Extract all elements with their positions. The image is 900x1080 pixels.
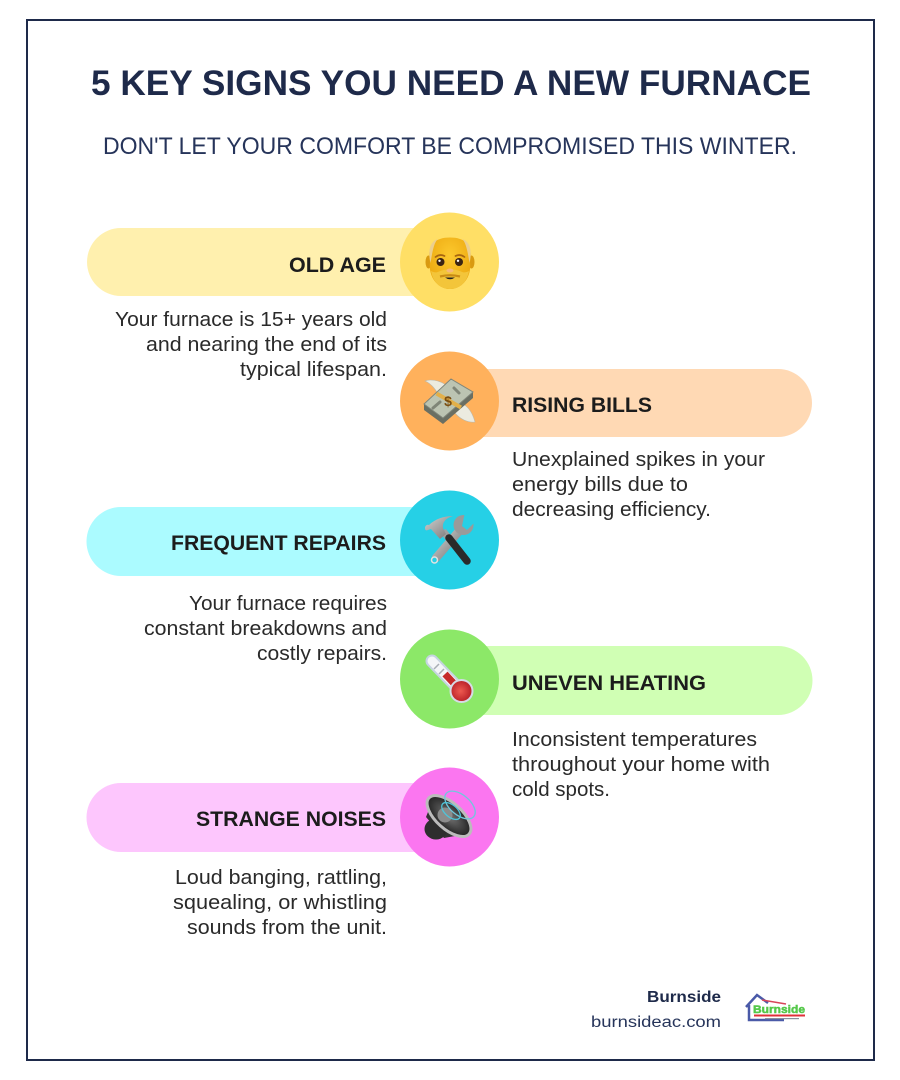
rising bills heading: RISING BILLS	[512, 393, 652, 417]
title: 5 KEY SIGNS YOU NEED A NEW FURNACE	[91, 64, 811, 103]
panel: uneven heating	[400, 630, 813, 801]
brand name: Burnside	[647, 989, 721, 1006]
old age description: typical lifespan.	[240, 358, 387, 381]
old age heading: OLD AGE	[289, 253, 386, 277]
panel: rising bills	[400, 352, 812, 521]
icon: older man face	[426, 238, 474, 289]
panel: frequent repairs	[87, 490, 499, 665]
strange noises description: squealing, or whistling	[173, 891, 387, 914]
frequent repairs banner	[87, 507, 430, 576]
icon: hammer and wrench	[425, 512, 478, 563]
rising bills description: Unexplained spikes in your	[512, 448, 765, 471]
icon: money with wings	[424, 379, 475, 424]
uneven heating banner	[470, 646, 813, 715]
frequent repairs circle	[400, 490, 499, 590]
old age description: Your furnace is 15+ years old	[115, 308, 387, 331]
panel: old age	[87, 212, 499, 381]
strange noises banner	[87, 783, 430, 852]
rising bills circle	[400, 352, 499, 450]
frequent repairs heading: FREQUENT REPAIRS	[171, 531, 386, 555]
strange noises heading: STRANGE NOISES	[196, 807, 386, 831]
old age banner	[87, 228, 430, 296]
strange noises description: sounds from the unit.	[187, 916, 387, 939]
frequent repairs description: costly repairs.	[257, 642, 387, 665]
rising bills description: decreasing efficiency.	[512, 498, 711, 521]
icon: speaker	[420, 786, 480, 844]
uneven heating circle	[400, 630, 499, 728]
subtitle: DON'T LET YOUR COMFORT BE COMPROMISED THIS WINTER.	[103, 133, 797, 160]
rising bills description	[512, 448, 765, 521]
panel: strange noises	[87, 768, 499, 939]
uneven heating description: throughout your home with	[512, 753, 770, 776]
old age description	[115, 308, 387, 381]
strange noises circle	[400, 768, 499, 866]
old age circle	[400, 212, 499, 312]
frequent repairs description: Your furnace requires	[189, 592, 387, 615]
uneven heating description: Inconsistent temperatures	[512, 728, 757, 751]
logo: Burnside	[753, 1004, 805, 1016]
rising bills banner	[470, 369, 812, 437]
website: burnsideac.com	[591, 1014, 721, 1031]
frequent repairs description	[144, 592, 387, 665]
uneven heating description	[512, 728, 770, 801]
icon: money with wings: $	[444, 393, 452, 409]
old age description: and nearing the end of its	[146, 333, 387, 356]
strange noises description	[173, 866, 387, 939]
icon: thermometer	[432, 661, 474, 703]
logo	[746, 995, 805, 1020]
uneven heating description: cold spots.	[512, 778, 610, 801]
frequent repairs description: constant breakdowns and	[144, 617, 387, 640]
footer brand block	[591, 989, 805, 1031]
uneven heating heading: UNEVEN HEATING	[512, 671, 706, 695]
strange noises description: Loud banging, rattling,	[175, 866, 387, 889]
rising bills description: energy bills due to	[512, 473, 688, 496]
